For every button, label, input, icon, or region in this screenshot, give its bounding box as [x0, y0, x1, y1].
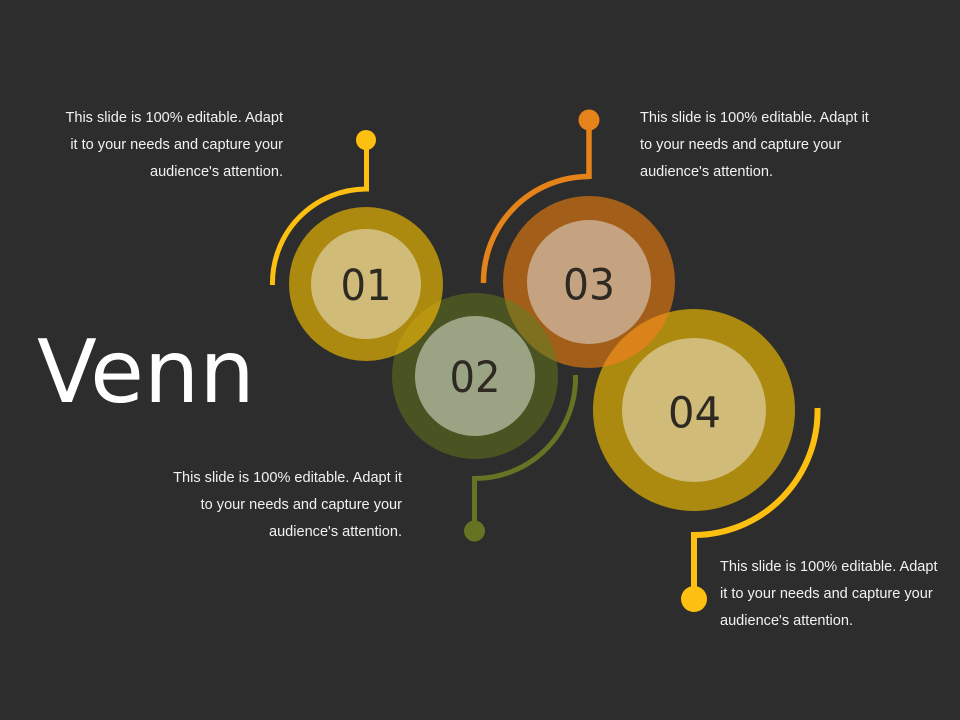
connector 02	[464, 375, 576, 542]
connector 04	[681, 408, 818, 612]
text block 03: audience's attention.	[640, 164, 773, 180]
text block 02	[173, 470, 402, 540]
circle 04: 04	[668, 388, 721, 438]
title: Venn	[37, 321, 255, 423]
text block 02: This slide is 100% editable. Adapt it	[173, 470, 402, 486]
text block 03: This slide is 100% editable. Adapt it	[640, 110, 869, 126]
text block 01: audience's attention.	[150, 164, 283, 180]
text block 04: it to your needs and capture your	[720, 586, 933, 602]
circle 02	[392, 293, 558, 459]
text block 04: This slide is 100% editable. Adapt	[720, 559, 938, 575]
text block 04: audience's attention.	[720, 613, 853, 629]
circle 01: 01	[340, 261, 392, 311]
text block 02: to your needs and capture your	[201, 497, 402, 513]
text block 01	[65, 110, 283, 180]
connector 01	[272, 130, 376, 285]
circle 04	[593, 309, 795, 511]
text block 04	[720, 559, 938, 629]
text block 03: to your needs and capture your	[640, 137, 841, 153]
text block 03	[640, 110, 869, 180]
circle 01	[289, 207, 443, 361]
circle 03: 03	[563, 260, 615, 310]
circle 02: 02	[450, 353, 500, 403]
connector 03	[483, 110, 600, 283]
circle 03	[503, 196, 675, 368]
text block 02: audience's attention.	[269, 524, 402, 540]
text block 01: it to your needs and capture your	[70, 137, 283, 153]
text block 01: This slide is 100% editable. Adapt	[65, 110, 283, 126]
